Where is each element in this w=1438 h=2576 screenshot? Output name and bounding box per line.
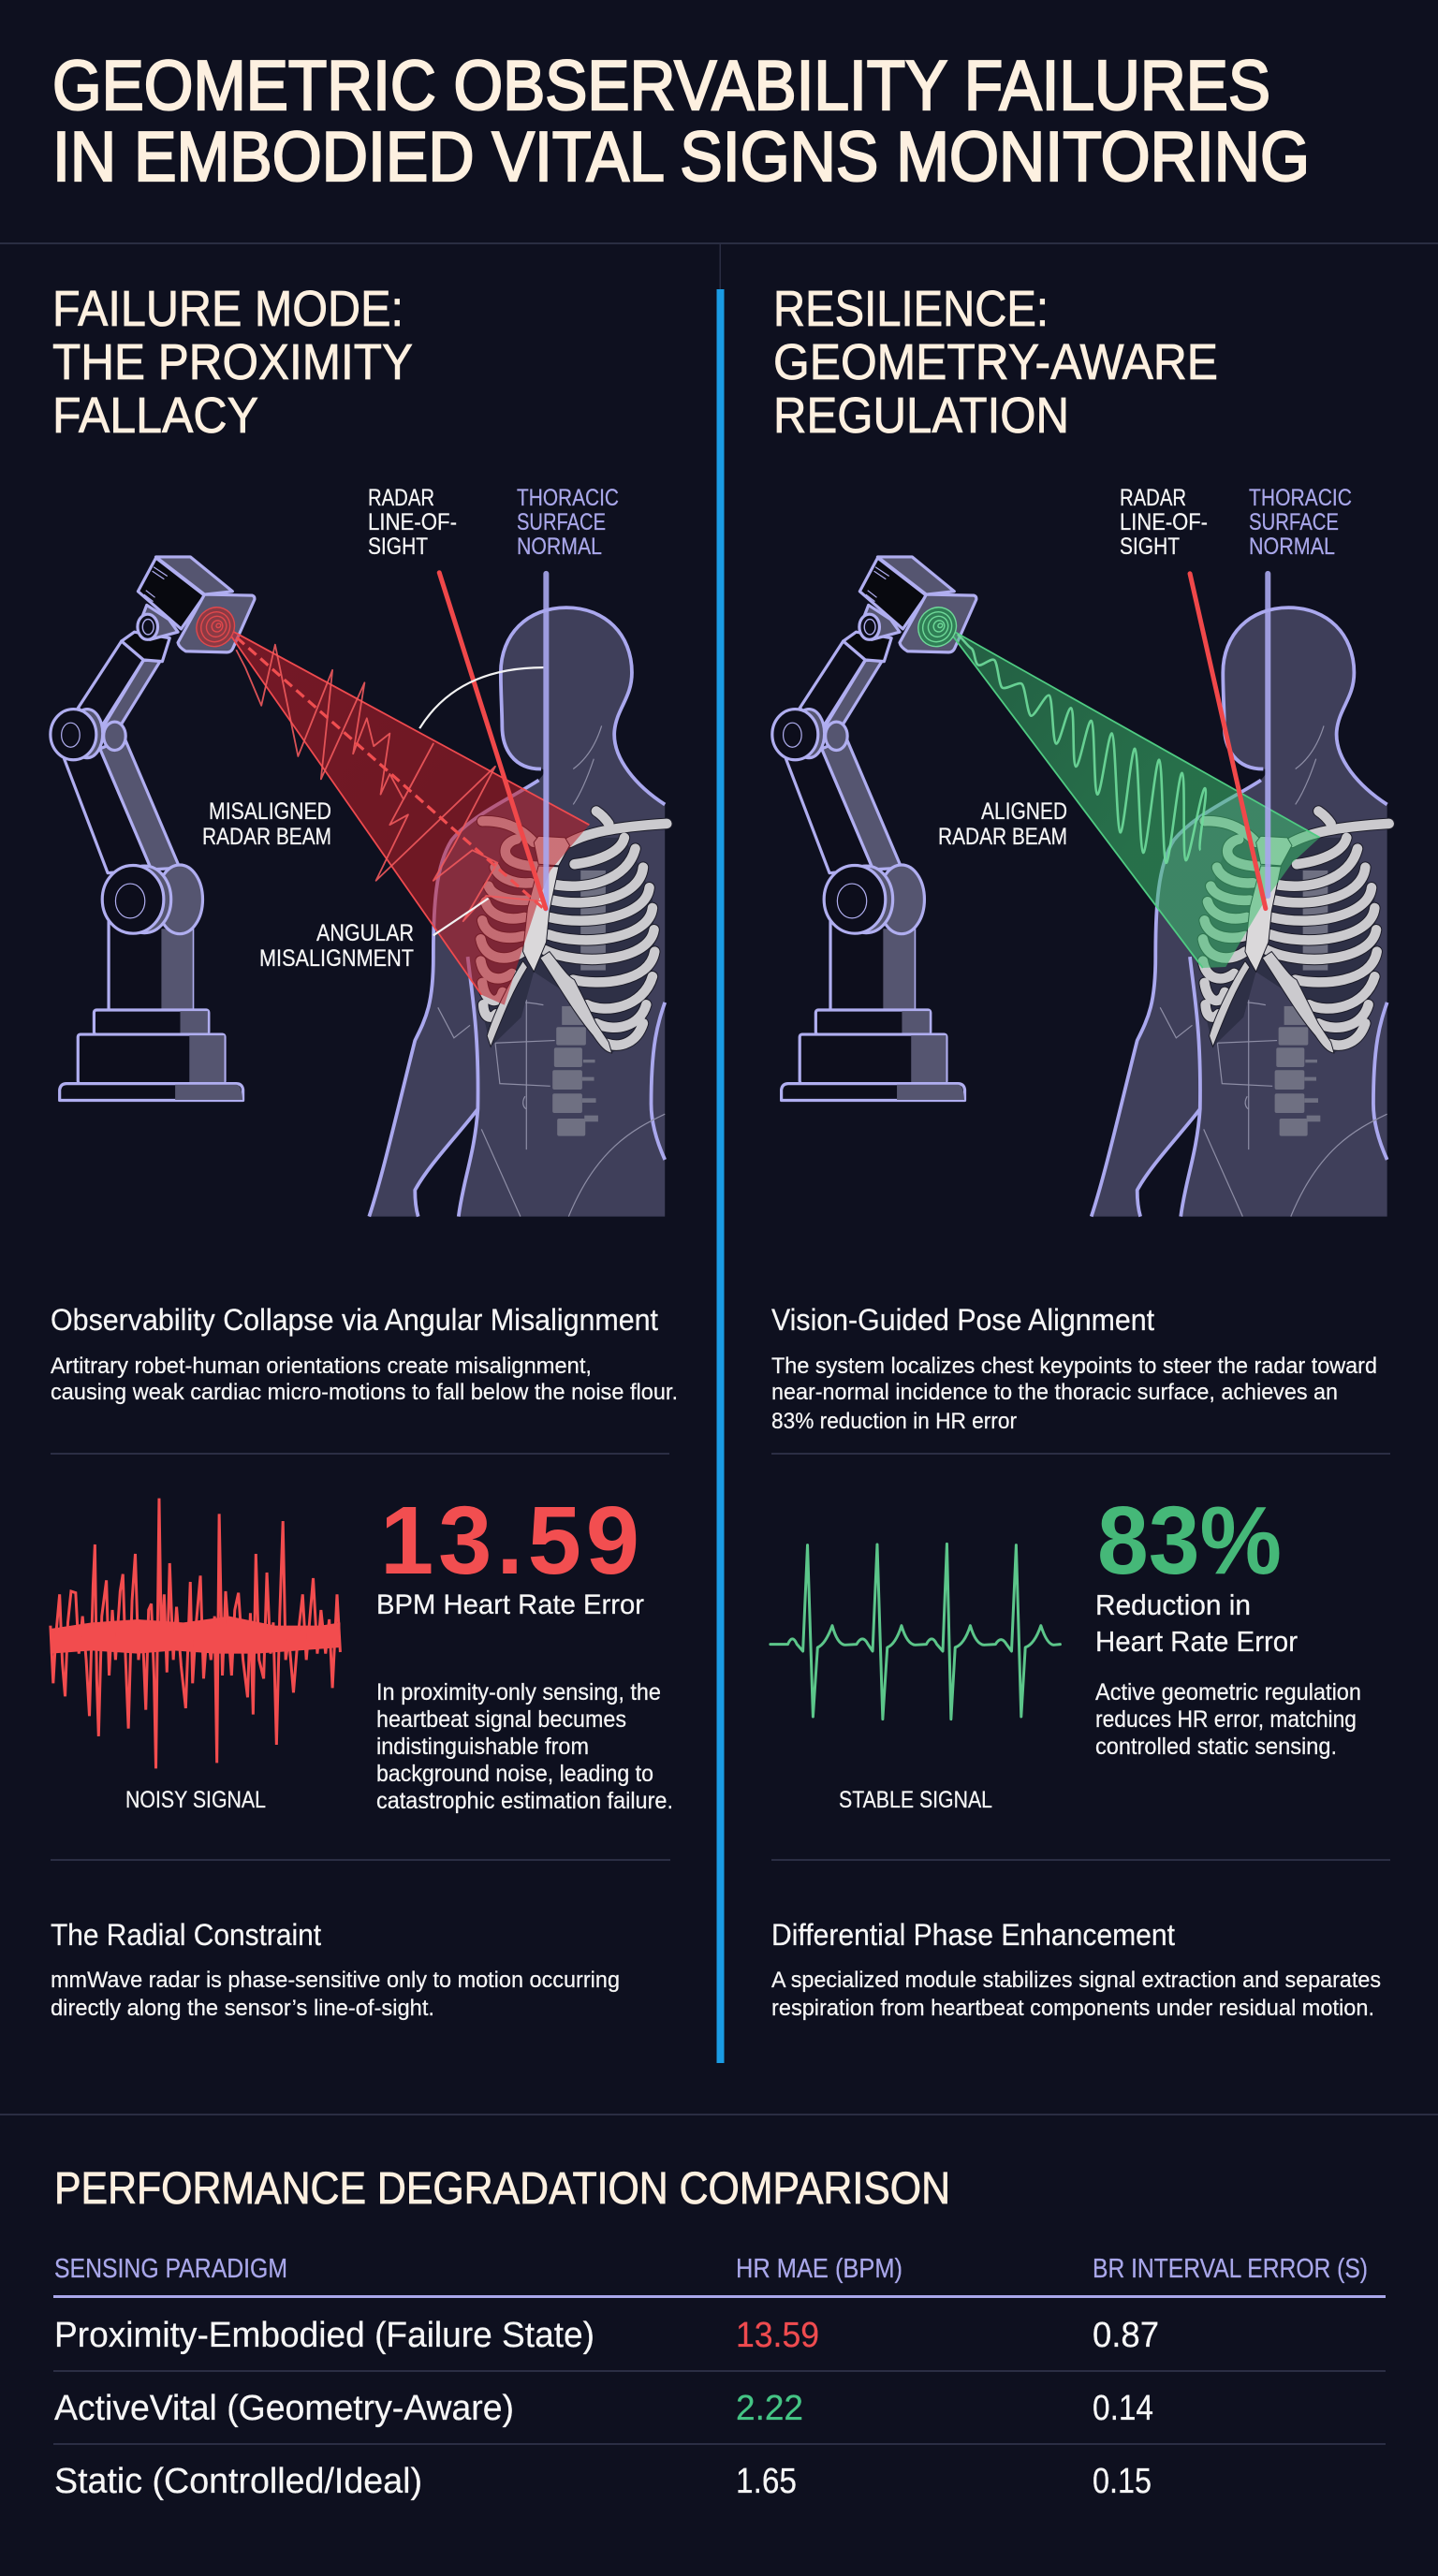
title: GEOMETRIC OBSERVABILITY FAILURES xyxy=(52,46,1270,124)
labels: thoracic surface normal: THORACIC xyxy=(1249,485,1352,511)
text block: proximity sensing explanation xyxy=(376,1679,673,1814)
text block: the radial constraint: directly along the sensor’s line-of-sight. xyxy=(51,1996,434,2021)
table row: activevital: 2.22 xyxy=(736,2389,803,2428)
heading: resilience: REGULATION xyxy=(773,388,1069,444)
table row: proximity-embodied: Proximity-Embodied (Failure State) xyxy=(54,2316,594,2355)
centre divider bar xyxy=(717,289,725,2063)
labels: aligned radar beam xyxy=(938,798,1067,850)
table row: proximity-embodied: 0.87 xyxy=(1093,2316,1159,2355)
table column headers xyxy=(54,2254,1368,2284)
labels: angular misalignment xyxy=(259,920,414,972)
icon: human torso with rib cage xyxy=(1092,607,1389,1217)
text block: observability collapse: Artitrary robet-human orientations create misalignment, xyxy=(51,1354,592,1379)
title: IN EMBODIED VITAL SIGNS MONITORING xyxy=(52,117,1310,196)
heading: resilience xyxy=(773,281,1218,444)
radar line of sight xyxy=(439,573,546,909)
labels: misaligned radar beam: RADAR BEAM xyxy=(202,824,331,850)
text block: active regulation explanation: Active geometric regulation xyxy=(1095,1679,1361,1705)
labels: radar line of sight: SIGHT xyxy=(368,534,428,560)
labels: thoracic surface normal: SURFACE xyxy=(517,509,606,535)
text block: proximity sensing explanation: background noise, leading to xyxy=(376,1761,653,1787)
labels: thoracic surface normal: THORACIC xyxy=(517,485,619,511)
panel: failure mode xyxy=(51,281,678,2021)
heading: resilience: GEOMETRY-AWARE xyxy=(773,334,1218,390)
table row: activevital: 0.14 xyxy=(1093,2389,1153,2428)
stat: 13.59 heart rate error: 13.59 xyxy=(380,1486,639,1594)
labels: angular misalignment: MISALIGNMENT xyxy=(259,945,414,972)
heading: failure mode: THE PROXIMITY xyxy=(52,334,413,390)
text block: proximity sensing explanation: heartbeat signal becumes xyxy=(376,1706,626,1733)
text block: vision-guided pose alignment: 83% reduction in HR error xyxy=(771,1409,1017,1434)
radar beam green xyxy=(913,601,1320,968)
radar beam red xyxy=(191,601,589,1005)
labels: aligned radar beam: RADAR BEAM xyxy=(938,824,1067,850)
text block: active regulation explanation: reduces HR error, matching xyxy=(1095,1706,1357,1733)
table row: static: 0.15 xyxy=(1093,2462,1152,2501)
table row: static: 1.65 xyxy=(736,2462,797,2501)
text block: the radial constraint: The Radial Constraint xyxy=(51,1918,321,1952)
table row: activevital xyxy=(54,2389,1153,2428)
labels: radar line of sight: SIGHT xyxy=(1120,534,1180,560)
panel: resilience xyxy=(770,281,1390,2021)
labels: radar line of sight: RADAR xyxy=(368,485,434,511)
table column headers: HR MAE (BPM) xyxy=(736,2254,902,2284)
text block: vision-guided pose alignment: The system localizes chest keypoints to steer the radar toward xyxy=(771,1354,1377,1379)
table row: proximity-embodied xyxy=(54,2316,1159,2355)
table column headers: SENSING PARADIGM xyxy=(54,2254,287,2284)
diagram: misaligned radar beam xyxy=(51,485,667,1217)
text block: proximity sensing explanation: indistinguishable from xyxy=(376,1734,589,1760)
icon: robot arm xyxy=(772,557,976,1101)
stat: 83% reduction xyxy=(1095,1486,1298,1658)
text block: the radial constraint xyxy=(51,1918,620,2021)
labels: thoracic surface normal xyxy=(517,485,619,560)
diagram: aligned radar beam xyxy=(772,485,1389,1217)
title xyxy=(52,46,1310,196)
text block: proximity sensing explanation: In proximity-only sensing, the xyxy=(376,1679,661,1705)
labels: radar line of sight xyxy=(368,485,457,560)
surface normal line xyxy=(1265,574,1270,896)
text block: proximity sensing explanation: catastrophic estimation failure. xyxy=(376,1788,673,1814)
labels: thoracic surface normal: NORMAL xyxy=(1249,534,1335,560)
stat: 13.59 heart rate error: BPM Heart Rate Error xyxy=(376,1589,644,1620)
surface normal line xyxy=(543,574,549,909)
text block: vision-guided pose alignment: near-normal incidence to the thoracic surface, achieves an xyxy=(771,1380,1338,1405)
labels: aligned radar beam: ALIGNED xyxy=(981,798,1067,825)
chart: noisy signal xyxy=(51,1499,340,1768)
heading: resilience: RESILIENCE: xyxy=(773,281,1049,337)
text block: active regulation explanation: controlled static sensing. xyxy=(1095,1734,1337,1760)
table heading: PERFORMANCE DEGRADATION COMPARISON xyxy=(54,2164,950,2214)
table row: activevital: ActiveVital (Geometry-Aware) xyxy=(54,2389,514,2428)
table row: static xyxy=(54,2462,1152,2501)
table row: proximity-embodied: 13.59 xyxy=(736,2316,819,2355)
radar line of sight xyxy=(1190,574,1266,909)
stat: 83% reduction: Heart Rate Error xyxy=(1095,1625,1298,1658)
chart: stable ECG signal xyxy=(770,1544,1060,1720)
stat: 83% reduction: Reduction in xyxy=(1095,1588,1251,1621)
text block: observability collapse: Observability Collapse via Angular Misalignment xyxy=(51,1303,658,1337)
icon: robot arm xyxy=(51,557,255,1101)
labels: thoracic surface normal: NORMAL xyxy=(517,534,602,560)
icon: human torso with rib cage xyxy=(369,607,667,1217)
labels: thoracic surface normal xyxy=(1249,485,1352,560)
text block: vision-guided pose alignment xyxy=(771,1303,1377,1434)
labels: angular misalignment: ANGULAR xyxy=(316,920,414,946)
angle pointer xyxy=(419,667,543,935)
labels: misaligned radar beam xyxy=(202,798,331,850)
labels: radar line of sight: RADAR xyxy=(1120,485,1186,511)
text block: differential phase enhancement: Differential Phase Enhancement xyxy=(771,1918,1175,1952)
label: stable signal: STABLE SIGNAL xyxy=(839,1787,992,1813)
text block: differential phase enhancement xyxy=(771,1918,1381,2021)
text block: differential phase enhancement: A specialized module stabilizes signal extraction and separates xyxy=(771,1968,1381,1993)
heading: failure mode: FALLACY xyxy=(52,388,258,444)
table row: static: Static (Controlled/Ideal) xyxy=(54,2462,422,2501)
labels: radar line of sight: LINE-OF- xyxy=(1120,509,1208,535)
text block: the radial constraint: mmWave radar is phase-sensitive only to motion occurring xyxy=(51,1968,620,1993)
labels: radar line of sight xyxy=(1120,485,1208,560)
text block: observability collapse: causing weak cardiac micro-motions to fall below the noise flour. xyxy=(51,1380,678,1405)
labels: thoracic surface normal: SURFACE xyxy=(1249,509,1339,535)
labels: misaligned radar beam: MISALIGNED xyxy=(209,798,331,825)
heading: failure mode: FAILURE MODE: xyxy=(52,281,404,337)
label: noisy signal: NOISY SIGNAL xyxy=(125,1787,266,1813)
text block: vision-guided pose alignment: Vision-Guided Pose Alignment xyxy=(771,1303,1154,1337)
labels: radar line of sight: LINE-OF- xyxy=(368,509,457,535)
stat: 83% reduction: 83% xyxy=(1097,1486,1282,1594)
heading: failure mode xyxy=(52,281,413,444)
panel: performance comparison table xyxy=(53,2164,1386,2501)
table column headers: BR INTERVAL ERROR (S) xyxy=(1093,2254,1368,2284)
text block: observability collapse xyxy=(51,1303,678,1405)
text block: differential phase enhancement: respiration from heartbeat components under residual motion. xyxy=(771,1996,1374,2021)
text block: active regulation explanation xyxy=(1095,1679,1361,1760)
